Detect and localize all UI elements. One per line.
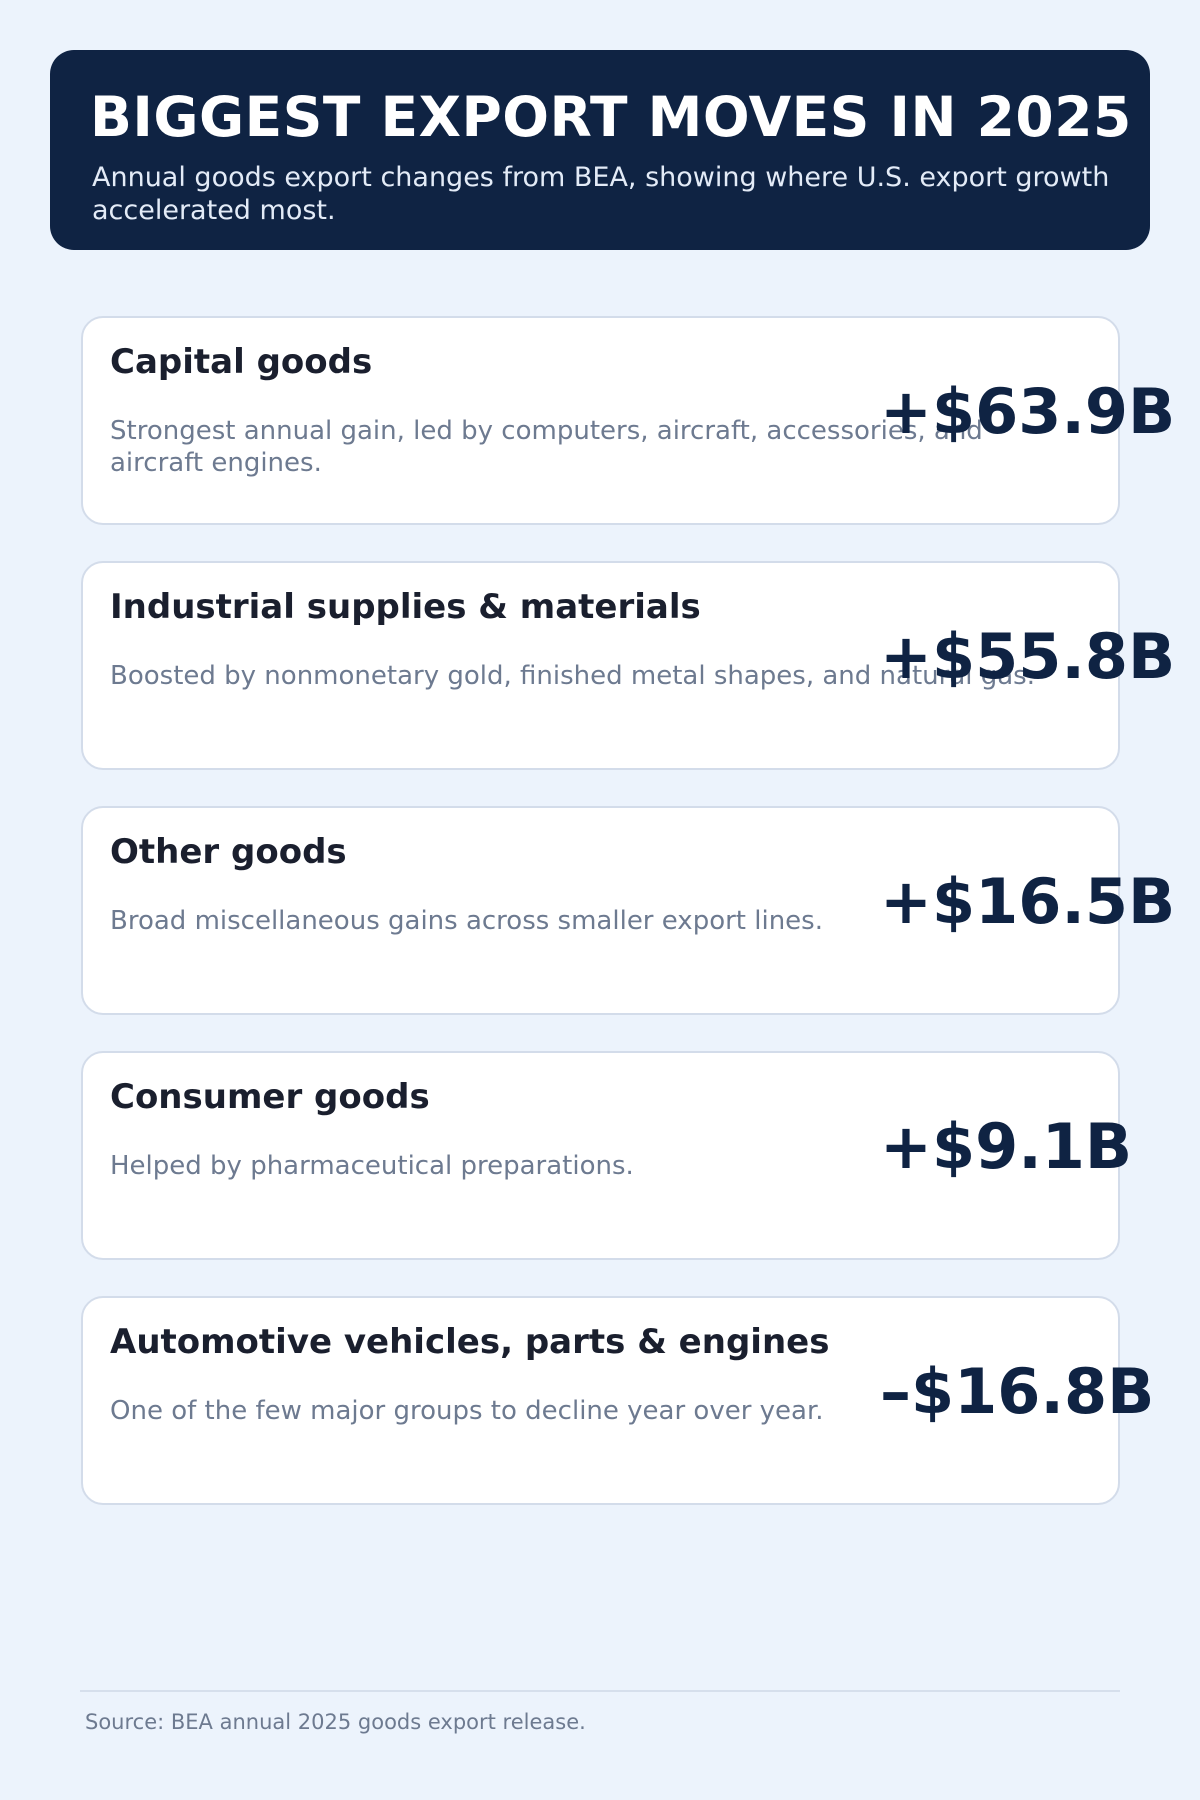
card description: Helped by pharmaceutical preparations. xyxy=(110,1151,634,1181)
subtitle: Annual goods export changes from BEA, showing where U.S. export growth accelerated most. xyxy=(92,162,1109,226)
title: BIGGEST EXPORT MOVES IN 2025 xyxy=(90,85,1132,149)
card description: Strongest annual gain, led by computers, aircraft, accessories, and aircraft engines. xyxy=(110,416,983,478)
card: consumer goods xyxy=(81,1051,1120,1260)
card title: Automotive vehicles, parts & engines xyxy=(110,1322,829,1362)
card title: Other goods xyxy=(110,832,347,872)
card: automotive xyxy=(81,1296,1120,1505)
header banner xyxy=(50,50,1150,250)
card description: Broad miscellaneous gains across smaller export lines. xyxy=(110,906,823,936)
card title: Industrial supplies & materials xyxy=(110,587,701,627)
card: industrial supplies xyxy=(81,561,1120,770)
value: +$16.5B xyxy=(880,865,1175,938)
card: other goods xyxy=(81,806,1120,1015)
card: capital goods xyxy=(81,316,1120,525)
value: +$9.1B xyxy=(880,1110,1132,1183)
value: –$16.8B xyxy=(880,1355,1154,1428)
card description: Boosted by nonmonetary gold, finished metal shapes, and natural gas. xyxy=(110,661,1035,691)
value: +$63.9B xyxy=(880,375,1175,448)
card description: One of the few major groups to decline year over year. xyxy=(110,1396,824,1426)
card title: Consumer goods xyxy=(110,1077,430,1117)
value: +$55.8B xyxy=(880,620,1175,693)
card title: Capital goods xyxy=(110,342,372,382)
source footnote: Source: BEA annual 2025 goods export release. xyxy=(85,1710,586,1734)
